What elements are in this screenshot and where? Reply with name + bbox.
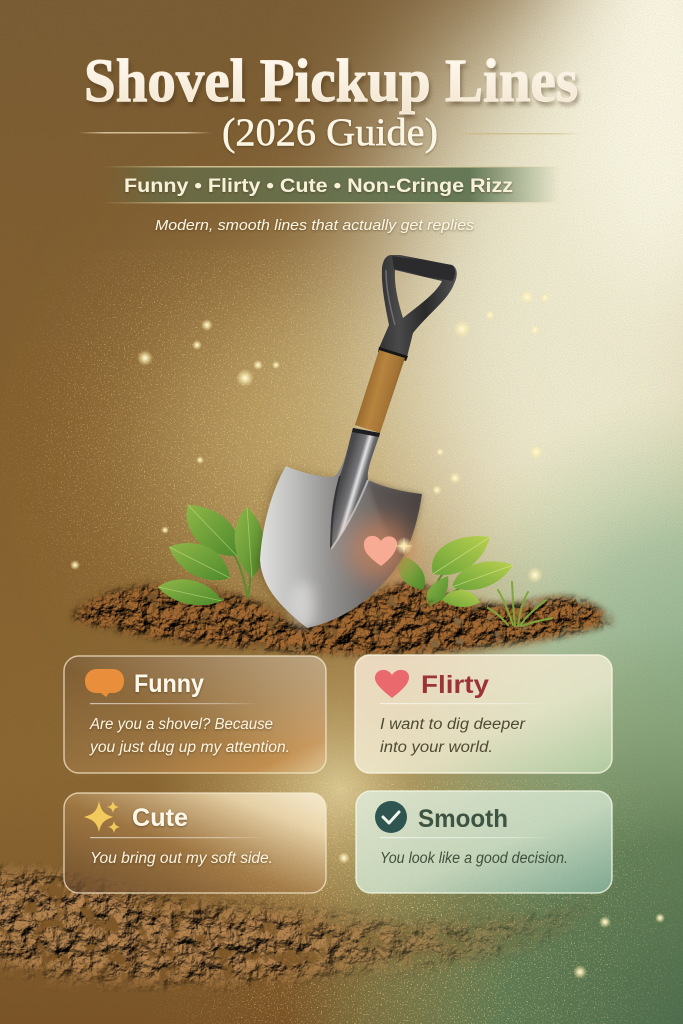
- shovel shadow: [256, 472, 419, 637]
- heading: flirty: Flirty: [421, 671, 489, 699]
- shovel: [256, 255, 457, 637]
- icon: speech bubble: [85, 669, 124, 697]
- icon: heart: [375, 670, 409, 698]
- text: funny line: Are you a shovel? Because: [89, 716, 273, 733]
- text: funny line: [89, 716, 290, 756]
- card: funny: [64, 656, 326, 773]
- category banner: [100, 166, 565, 204]
- text: cute line: You bring out my soft side.: [90, 850, 273, 867]
- sparkles: [70, 290, 665, 979]
- shovel heart glint: [348, 518, 413, 582]
- shovel blade: [260, 428, 422, 629]
- icon: check badge: [375, 801, 407, 833]
- lower soil: [0, 872, 600, 982]
- subtitle: 2026 guide: (2026 Guide): [222, 111, 438, 154]
- category banner: Funny • Flirty • Cute • Non-Cringe Rizz: [124, 175, 513, 197]
- plant: left: [158, 505, 264, 605]
- shovel wooden shaft: [355, 350, 405, 433]
- title: Shovel Pickup Lines: [86, 52, 580, 119]
- icon: sparkles: [84, 801, 120, 833]
- plant: grass: [488, 582, 552, 626]
- soil front of blade: [262, 591, 486, 653]
- card: cute: [64, 793, 326, 893]
- card: flirty: [355, 655, 612, 773]
- card: smooth: [356, 791, 612, 893]
- heading: smooth: Smooth: [418, 805, 508, 833]
- tagline: Modern, smooth lines that actually get replies: [155, 217, 475, 234]
- plant: right: [398, 536, 513, 607]
- heading: funny: Funny: [134, 670, 204, 698]
- shovel handle grip: [378, 255, 457, 361]
- text: flirty line: [380, 716, 526, 756]
- title: Shovel Pickup Lines: [84, 48, 578, 115]
- soil mound: [72, 582, 612, 652]
- text: smooth line: You look like a good decision.: [380, 850, 568, 867]
- text: flirty line: into your world.: [380, 739, 493, 756]
- text: funny line: you just dug up my attention.: [89, 739, 290, 756]
- text: flirty line: I want to dig deeper: [380, 716, 526, 733]
- heading: cute: Cute: [132, 804, 188, 832]
